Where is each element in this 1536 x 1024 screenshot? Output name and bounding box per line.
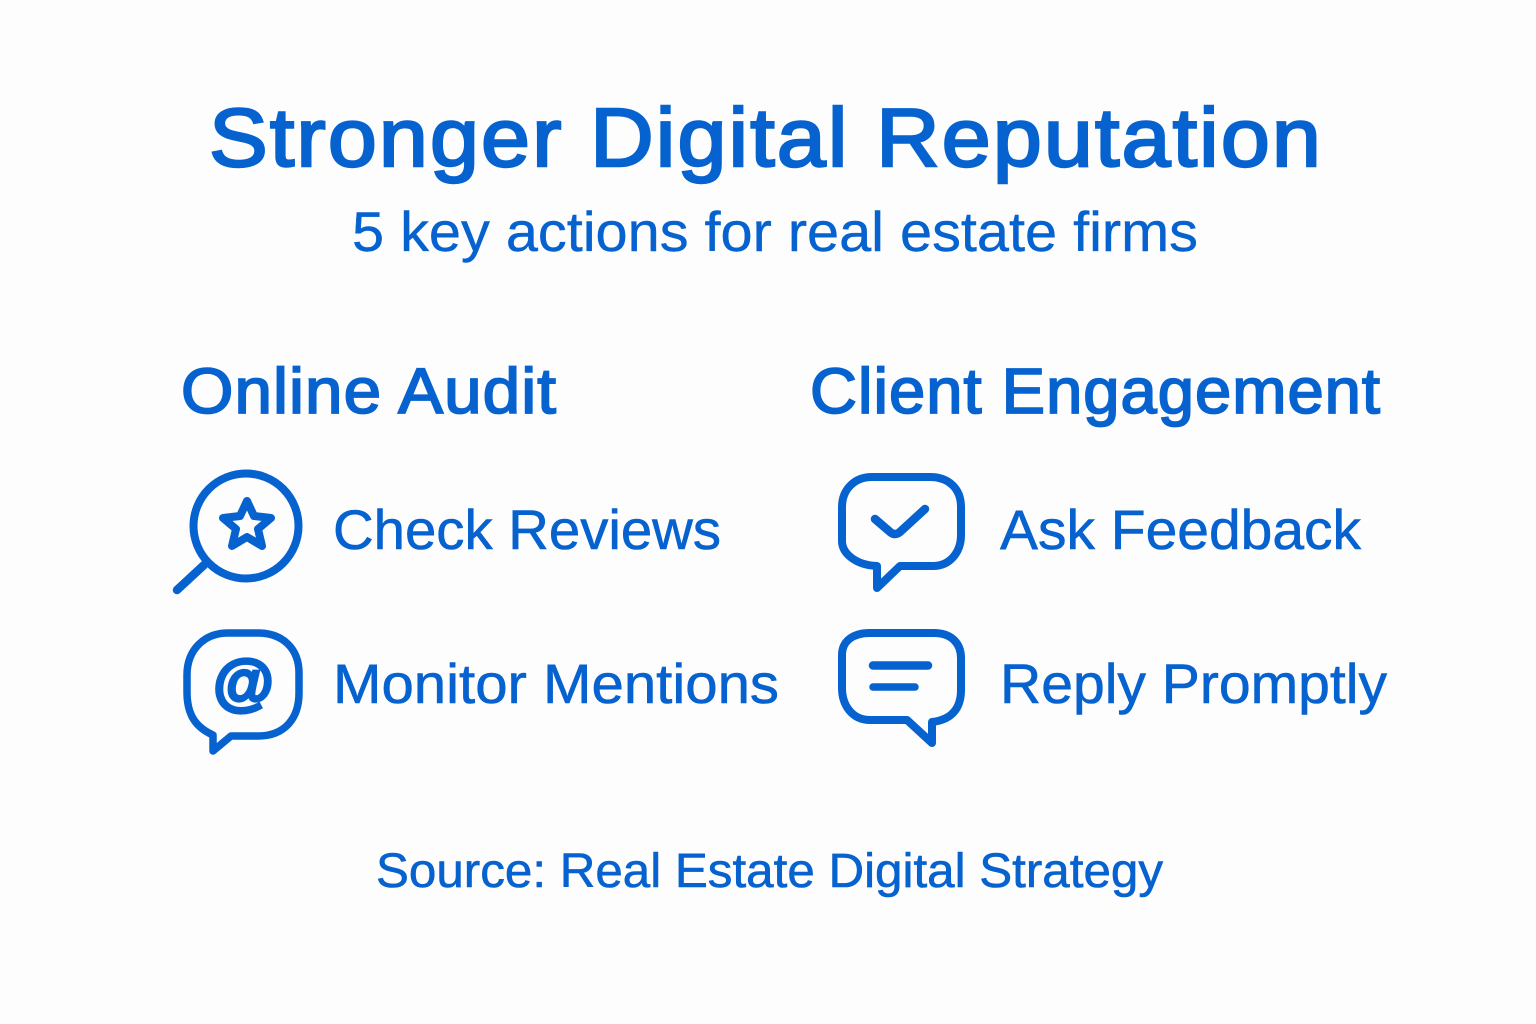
source note: Source: Real Estate Digital Strategy bbox=[376, 845, 1163, 898]
title: Stronger Digital Reputation bbox=[209, 91, 1323, 184]
heading: online audit: Online Audit bbox=[181, 355, 557, 427]
icon: speech bubble with lines bbox=[842, 633, 961, 743]
icon: speech bubble with check bbox=[842, 477, 961, 588]
subtitle: 5 key actions for real estate firms bbox=[352, 200, 1198, 263]
icon: magnifier with star bbox=[177, 474, 298, 590]
heading: client engagement: Client Engagement bbox=[810, 355, 1381, 427]
label: ask feedback: Ask Feedback bbox=[1000, 498, 1362, 561]
icon: at-sign speech bubble bbox=[187, 633, 299, 751]
label: monitor mentions: Monitor Mentions bbox=[333, 652, 779, 715]
label: reply promptly: Reply Promptly bbox=[1000, 652, 1387, 715]
icon: at-sign speech bubble: @ bbox=[213, 648, 274, 717]
label: check reviews: Check Reviews bbox=[333, 498, 721, 561]
